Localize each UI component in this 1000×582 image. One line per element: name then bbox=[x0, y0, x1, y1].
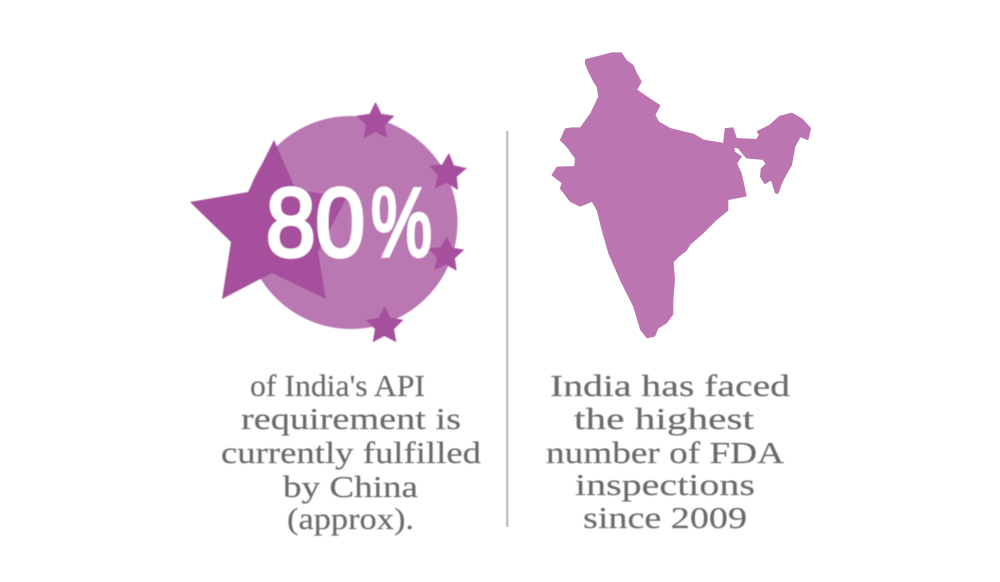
text block: FDA description: the highest bbox=[574, 401, 755, 436]
text block: API description: (approx). bbox=[287, 501, 414, 536]
text block: FDA description: inspections bbox=[575, 467, 755, 502]
text block: FDA description: India has faced bbox=[550, 368, 791, 403]
icon: small star top bbox=[356, 102, 394, 138]
text block: FDA description bbox=[546, 368, 791, 535]
icon: small star lower right bbox=[427, 235, 465, 271]
divider bbox=[506, 131, 508, 527]
text block: API description: of India's API bbox=[250, 368, 425, 403]
text block: API description: currently fulfilled bbox=[221, 435, 482, 470]
text block: FDA description: since 2009 bbox=[583, 500, 747, 535]
icon: small star upper right bbox=[427, 152, 468, 190]
text block: API description: requirement is bbox=[241, 401, 461, 436]
icon: large star bbox=[190, 140, 347, 299]
text block: API description bbox=[221, 368, 482, 536]
icon: map of India bbox=[553, 53, 810, 337]
text block: FDA description: number of FDA bbox=[546, 435, 785, 470]
panel: 80 percent statistic bbox=[190, 102, 468, 342]
text block: API description: by China bbox=[283, 469, 418, 504]
icon: small star bottom bbox=[366, 306, 404, 342]
big number: % bbox=[371, 168, 432, 277]
big number: 80 bbox=[266, 168, 365, 277]
icon: circle bbox=[244, 116, 458, 329]
